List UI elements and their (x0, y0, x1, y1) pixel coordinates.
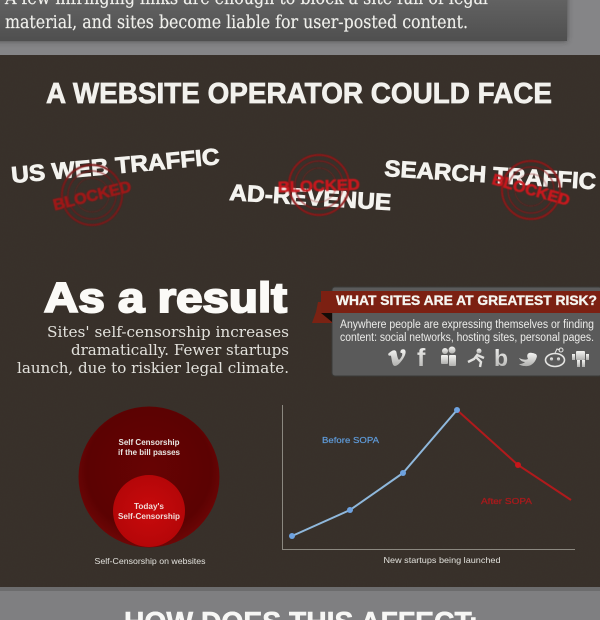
inner circle label: Today's (134, 502, 165, 511)
social icons (388, 344, 589, 372)
inner circle label: Self-Censorship (118, 512, 180, 521)
data points (289, 407, 460, 539)
icon: digg-style figure (572, 351, 589, 367)
panel: greatest risk (312, 287, 600, 376)
icon: facebook: f (417, 344, 426, 372)
stamp (490, 161, 572, 219)
stamp (46, 156, 138, 234)
top text panel (0, 0, 567, 41)
outer circle label: if the bill passes (118, 448, 181, 457)
result description (17, 323, 289, 377)
outer circle (78, 406, 220, 548)
chart caption: Self-Censorship on websites (94, 556, 206, 566)
before sopa line (292, 410, 457, 536)
stamp (278, 155, 360, 215)
before sopa label: Before SOPA (322, 435, 379, 445)
icon: myspace (441, 346, 456, 366)
blocked item: ad-revenue (229, 155, 392, 215)
panel text (4, 0, 488, 33)
after sopa line (457, 410, 571, 500)
icon: twitter (519, 353, 537, 366)
ribbon (321, 291, 600, 313)
blocked item: us web traffic (10, 143, 221, 234)
label: SEARCH TRAFFIC (384, 155, 597, 194)
ribbon tail (312, 302, 332, 323)
icon: vimeo (388, 349, 406, 366)
outer circle label (118, 438, 181, 457)
ribbon heading: WHAT SITES ARE AT GREATEST RISK? (336, 293, 597, 308)
chart caption: New startups being launched (384, 555, 501, 565)
stamp: BLOCKED (51, 179, 133, 214)
bottom gray section (0, 587, 600, 620)
icon: blogger b: b (494, 345, 508, 371)
result description: Sites' self-censorship increases (47, 323, 289, 341)
icon: runner (468, 348, 484, 367)
top gray section (0, 0, 600, 56)
risk description (340, 319, 594, 344)
label: US WEB TRAFFIC (10, 143, 221, 188)
result description: launch, due to riskier legal climate. (17, 359, 289, 377)
axes (282, 405, 575, 550)
heading: a website operator could face: A WEBSITE OPERATOR COULD FACE (46, 78, 552, 110)
stamp: BLOCKED (278, 177, 360, 196)
inner circle label (118, 502, 180, 521)
panel text: material, and sites become liable for user-posted content. (5, 13, 468, 33)
stamp: BLOCKED (490, 171, 572, 210)
heading: as a result: As a result (44, 274, 287, 321)
chart: self-censorship circles (78, 406, 220, 566)
blocked item: search traffic (384, 155, 597, 219)
label: AD-REVENUE (229, 179, 392, 215)
result description: dramatically. Fewer startups (71, 341, 289, 359)
chart: startups line (282, 405, 575, 565)
outer circle label: Self Censorship (118, 438, 180, 447)
icon: reddit (546, 348, 564, 366)
after sopa label: After SOPA (481, 496, 532, 506)
inner circle (113, 475, 185, 547)
